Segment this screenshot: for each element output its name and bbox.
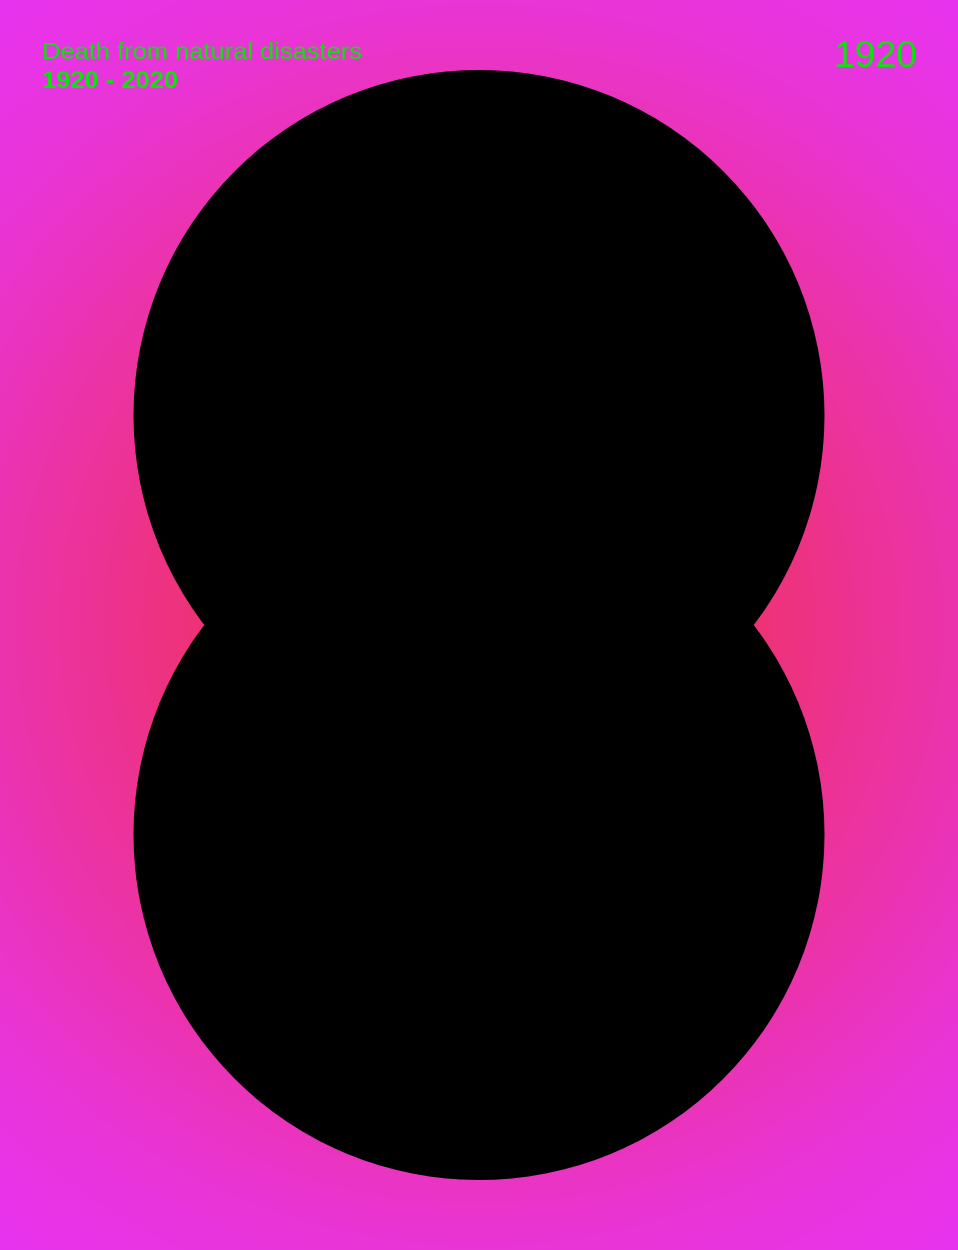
current year label: 1920 [834,34,917,75]
title: Death from natural disasters [42,38,362,64]
figure-eight chart: two overlapping black circles [134,70,824,1180]
top circle [134,70,824,761]
bottom circle [134,489,824,1180]
subtitle: year range: 1920 - 2020 [42,67,178,94]
